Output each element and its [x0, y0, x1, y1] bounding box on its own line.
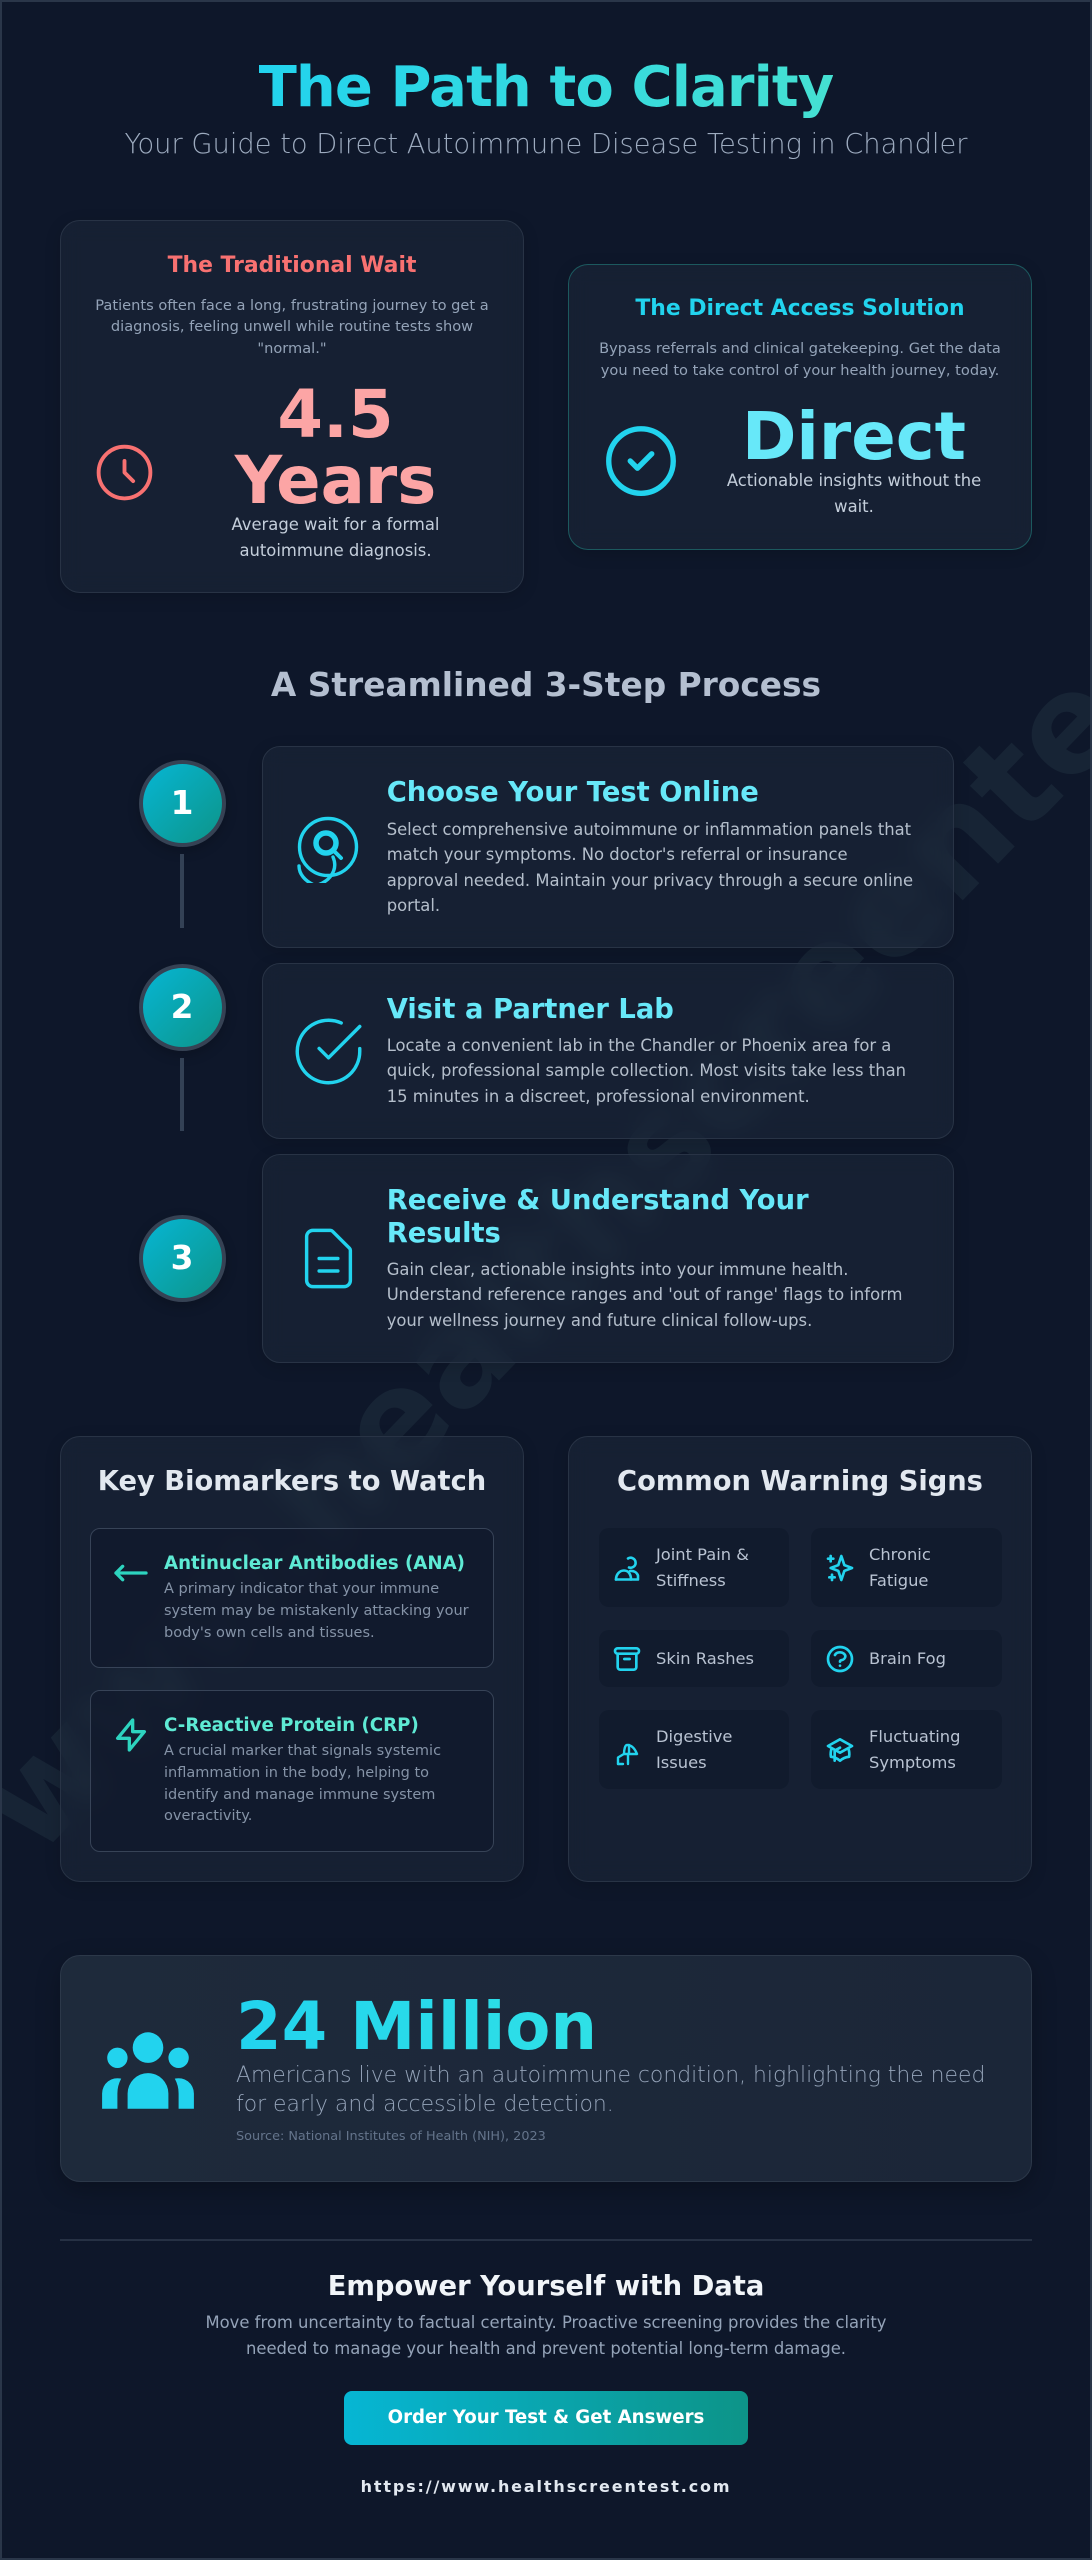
title: The Path to Clarity: [259, 55, 833, 120]
text: CRP description: [164, 1743, 441, 1824]
text: step 3 body: your wellness journey and future clinical follow-ups.: [387, 1311, 812, 1330]
stat: 4.5 years: Years: [235, 443, 436, 519]
heading: warning signs: Common Warning Signs: [617, 1466, 983, 1497]
text: CRP description: identify and manage immune system: [164, 1787, 435, 1803]
text: step 3 body: Understand reference ranges and 'out of range' flags to inform: [387, 1285, 903, 1304]
heading: direct access solution: The Direct Access Solution: [635, 296, 965, 321]
text: wait stat label: Average wait for a formal: [232, 515, 439, 534]
panel: step 1: [262, 746, 954, 948]
chip: joint pain: [599, 1528, 789, 1607]
text: wait description: "normal.": [257, 340, 327, 357]
step number 3: 3: [171, 1238, 193, 1276]
text: joint pain: Joint Pain &: [656, 1545, 749, 1564]
step number 2: [138, 964, 226, 1050]
button: order your test: Order Your Test & Get Answers: [388, 2407, 704, 2428]
text: stat description: Americans live with an autoimmune condition, highlighting the need: [236, 2063, 985, 2088]
text: direct access description: [599, 340, 1001, 379]
icon: joint pain: [614, 1556, 640, 1581]
text: CRP description: overactivity.: [164, 1808, 252, 1824]
stat: 4.5 years: 4.5: [277, 377, 394, 453]
icon: archive box: [614, 1647, 640, 1671]
card: ANA: [90, 1528, 494, 1668]
chip: fluctuating symptoms: [811, 1710, 1002, 1789]
panel: common warning signs: [568, 1436, 1032, 1882]
chip: brain fog: [811, 1630, 1002, 1687]
stat: 24 million: 24 Million: [236, 1989, 597, 2065]
step number 2: 2: [171, 988, 193, 1026]
text: direct access description: Bypass referrals and clinical gatekeeping. Get the data: [599, 340, 1001, 357]
text: digestive issues: Issues: [656, 1753, 707, 1772]
panel: the direct access solution: [568, 264, 1032, 550]
text: step 2 body: 15 minutes in a discreet, professional environment.: [387, 1087, 810, 1106]
icon: lightning bolt: [116, 1718, 146, 1752]
panel: step 3: [262, 1154, 954, 1363]
heading: receive and understand: [387, 1185, 809, 1249]
icon: check circle open: [296, 1018, 362, 1084]
text: wait description: Patients often face a long, frustrating journey to get a: [95, 297, 489, 314]
step number 1: 1: [171, 784, 193, 822]
chip: skin rashes: [599, 1630, 789, 1687]
text: ANA description: system may be mistakenly attacking your: [164, 1603, 469, 1619]
icon: academic cap: [826, 1738, 854, 1762]
heading: the traditional wait: The Traditional Wait: [168, 253, 416, 278]
text: stat description: for early and accessible detection.: [236, 2092, 614, 2117]
heading: ANA: Antinuclear Antibodies (ANA): [164, 1553, 465, 1574]
card: CRP: [90, 1690, 494, 1852]
step number 3: [138, 1214, 226, 1302]
text: direct stat label: [727, 471, 981, 516]
subtitle: Your Guide to Direct Autoimmune Disease Testing in Chandler: [124, 129, 968, 160]
panel: the traditional wait: [60, 220, 524, 593]
panel: key biomarkers: [60, 1436, 524, 1882]
text: step 1 body: match your symptoms. No doctor's referral or insurance: [387, 845, 848, 864]
text: ANA description: A primary indicator that your immune: [164, 1581, 439, 1597]
text: step 3 body: Gain clear, actionable insights into your immune health.: [387, 1260, 849, 1279]
icon: arrow left: [114, 1564, 148, 1582]
text: step 1 body: portal.: [387, 896, 440, 915]
heading: streamlined process: A Streamlined 3-Step Process: [271, 666, 821, 704]
text: digestive issues: [656, 1727, 732, 1772]
text: CRP description: A crucial marker that signals systemic: [164, 1743, 441, 1759]
button: order your test: [344, 2391, 748, 2445]
text: step 1 body: Select comprehensive autoimmune or inflammation panels that: [387, 820, 911, 838]
text: ANA description: body's own cells and tissues.: [164, 1625, 375, 1641]
step number 1: [138, 760, 226, 846]
text: step 2 body: quick, professional sample collection. Most visits take less than: [387, 1061, 906, 1080]
text: direct stat label: Actionable insights without the: [727, 471, 981, 490]
text: joint pain: [655, 1545, 749, 1590]
heading: empower yourself: Empower Yourself with Data: [328, 2271, 764, 2302]
text: joint pain: Stiffness: [656, 1571, 726, 1590]
icon: user group: [102, 2032, 194, 2109]
text: step 2 body: Locate a convenient lab in the Chandler or Phoenix area for a: [387, 1036, 891, 1055]
heading: key biomarkers: Key Biomarkers to Watch: [98, 1466, 486, 1497]
text: footer description: [206, 2313, 886, 2358]
chip: digestive issues: [599, 1710, 789, 1789]
text: digestive issues: Digestive: [656, 1727, 732, 1746]
stat: 4.5 years: [234, 377, 436, 519]
text: brain fog: Brain Fog: [869, 1649, 946, 1668]
text: direct access description: you need to take control of your health journey, today.: [601, 362, 999, 379]
icon: digestive: [616, 1744, 638, 1766]
text: step 1 body: approval needed. Maintain your privacy through a secure online: [387, 871, 913, 890]
text: chronic fatigue: [869, 1545, 931, 1590]
text: website url: https://www.healthscreentest.com: [361, 2477, 731, 2496]
connector 2: [180, 1058, 184, 1131]
text: footer description: Move from uncertainty to factual certainty. Proactive screening provides the clarity: [206, 2313, 886, 2332]
icon: clock: [96, 444, 152, 500]
connector 1: [180, 854, 184, 928]
text: footer description: needed to manage your health and prevent potential long-term damage.: [246, 2339, 846, 2358]
heading: receive and understand: Results: [387, 1218, 501, 1249]
text: fluctuating symptoms: Symptoms: [869, 1753, 956, 1772]
heading: choose your test: Choose Your Test Online: [387, 777, 759, 808]
heading: visit a partner lab: Visit a Partner Lab: [387, 994, 674, 1025]
footer divider: [60, 2239, 1032, 2241]
text: source: Source: National Institutes of Health (NIH), 2023: [236, 2129, 546, 2144]
heading: receive and understand: Receive & Understand Your: [387, 1185, 809, 1216]
text: ANA description: [164, 1581, 469, 1641]
text: wait stat label: autoimmune diagnosis.: [239, 541, 432, 560]
icon: document: [304, 1228, 352, 1288]
text: chronic fatigue: Fatigue: [869, 1571, 928, 1590]
text: step 2 body: [387, 1036, 906, 1106]
icon: sparkles: [826, 1554, 854, 1582]
text: chronic fatigue: Chronic: [869, 1545, 931, 1564]
stat: direct: Direct: [742, 399, 966, 475]
panel: 24 million stat: [60, 1955, 1032, 2182]
text: fluctuating symptoms: Fluctuating: [869, 1727, 960, 1746]
chip: chronic fatigue: [811, 1528, 1002, 1607]
text: step 1 body: [387, 820, 913, 915]
text: wait stat label: [232, 515, 439, 560]
text: direct stat label: wait.: [834, 497, 874, 516]
icon: question circle: [826, 1646, 854, 1672]
text: CRP description: inflammation in the body, helping to: [164, 1765, 429, 1781]
heading: CRP: C-Reactive Protein (CRP): [164, 1715, 419, 1736]
text: fluctuating symptoms: [869, 1727, 960, 1772]
icon: check circle: [606, 426, 676, 496]
text: wait description: [95, 297, 489, 357]
text: wait description: diagnosis, feeling unwell while routine tests show: [111, 318, 473, 335]
text: skin rashes: Skin Rashes: [656, 1649, 754, 1668]
text: step 3 body: [387, 1260, 903, 1330]
icon: search circle: [297, 816, 358, 883]
panel: step 2: [262, 963, 954, 1139]
text: stat description: [236, 2063, 985, 2117]
